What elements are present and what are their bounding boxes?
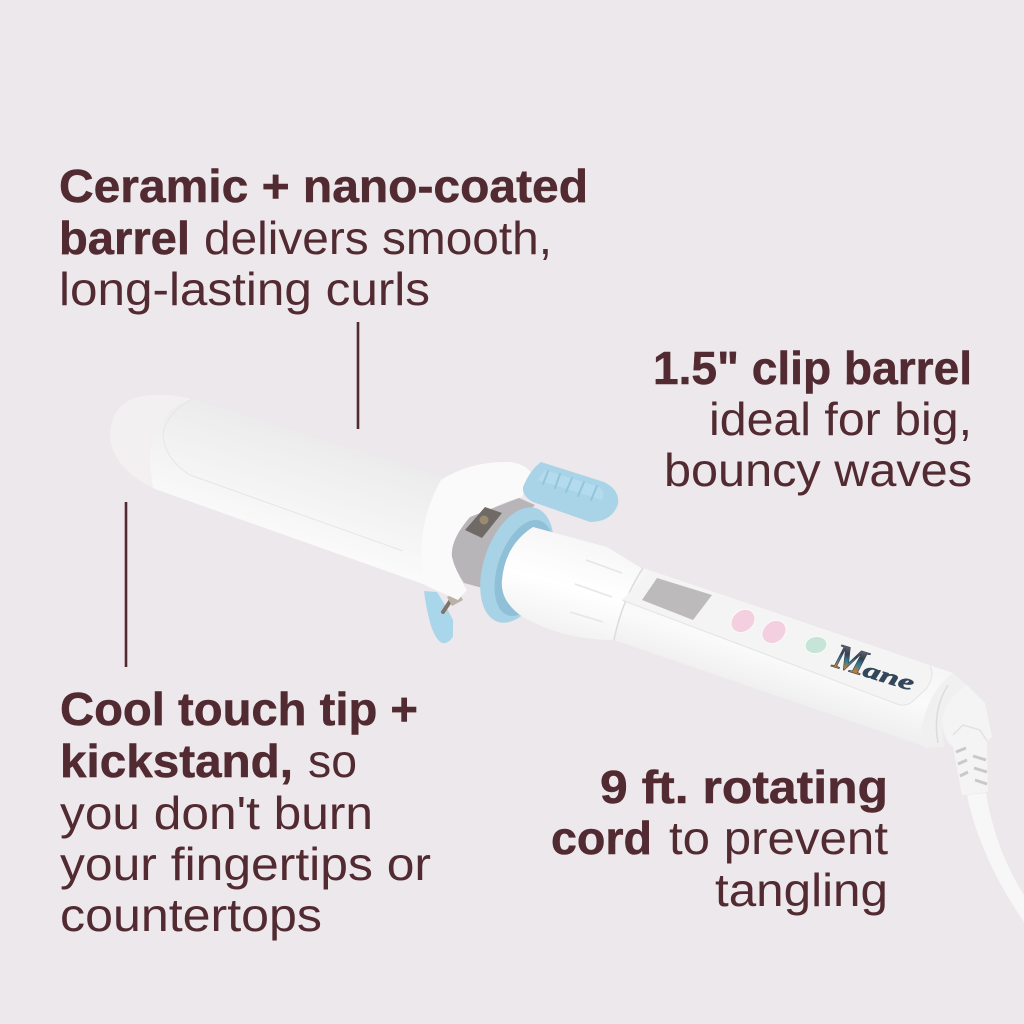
kickstand — [424, 591, 463, 643]
callout: rotating cord: 9 ft. rotating — [600, 761, 888, 813]
callout: ceramic barrel: barrel — [59, 212, 190, 264]
display screen — [642, 578, 712, 620]
barrel — [110, 395, 445, 592]
callout: clip barrel size: 1.5" clip barrel — [653, 342, 972, 394]
leader line: cool tip — [125, 502, 127, 667]
callout: cool touch tip: Cool touch tip + — [60, 683, 418, 735]
handle collar — [502, 527, 643, 640]
power cord — [967, 793, 1024, 922]
callout: rotating cord: tangling — [715, 864, 888, 916]
metal clip band — [452, 498, 535, 590]
callout: ceramic barrel — [59, 160, 588, 315]
brand logo: ane — [860, 657, 918, 696]
leader line: barrel — [357, 322, 359, 429]
handle — [614, 568, 953, 746]
callout: cool touch tip: kickstand, — [60, 735, 293, 787]
brand logo — [828, 635, 921, 699]
control panel — [622, 572, 932, 705]
brand logo: M — [828, 635, 874, 684]
callout: rotating cord: cord — [551, 812, 652, 864]
callout: cool touch tip: countertops — [60, 889, 322, 941]
handle end collar — [921, 673, 967, 748]
clip lever — [523, 462, 618, 522]
button: pink one — [726, 605, 760, 637]
button: pink two — [757, 616, 791, 648]
callout: ceramic barrel: delivers smooth, — [204, 212, 552, 264]
callout: clip barrel size: bouncy waves — [664, 444, 972, 496]
clip hub — [421, 462, 532, 600]
callout: rotating cord: to prevent — [669, 812, 888, 864]
callout: cool touch tip — [60, 683, 431, 941]
curling iron — [110, 395, 1024, 922]
blue ring — [466, 498, 568, 632]
callout: clip barrel size: ideal for big, — [709, 393, 972, 445]
callout: ceramic barrel: long-lasting curls — [59, 263, 430, 315]
callout: cool touch tip: so — [308, 735, 357, 787]
callout: rotating cord — [551, 761, 888, 916]
callout: cool touch tip: you don't burn — [60, 787, 373, 839]
cord boot — [942, 685, 992, 795]
callout: clip barrel size — [653, 342, 972, 496]
callout: cool touch tip: your fingertips or — [60, 838, 431, 890]
callout: ceramic barrel: Ceramic + nano-coated — [59, 160, 588, 212]
button: green — [804, 635, 828, 655]
